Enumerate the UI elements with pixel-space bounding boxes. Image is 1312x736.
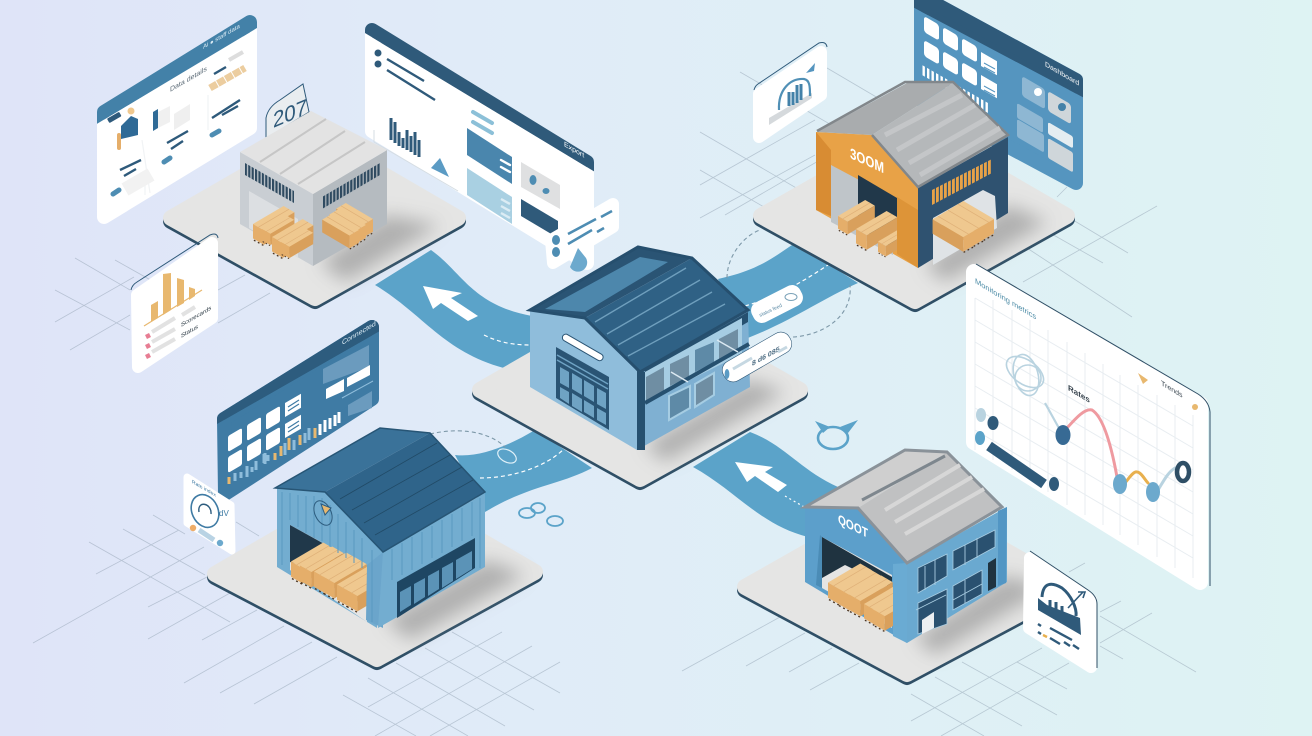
pallet of boxes, side door (933, 201, 994, 253)
panel: top-right blue dashboard (921, 0, 1079, 183)
card: radial dial (186, 477, 232, 551)
road: centre to top-left warehouse (375, 250, 534, 370)
panel: workforce dashboard (104, 22, 250, 217)
warehouse: lower-left blue (275, 428, 485, 628)
panel: main analytics dashboard (372, 30, 587, 263)
platform: bottom-left (215, 480, 535, 662)
platform: top-left (171, 135, 458, 301)
platform shadows (320, 205, 1048, 655)
pallets of boxes (291, 542, 390, 612)
road: centre to bottom-right warehouse (693, 432, 838, 537)
icon: ring with bow (815, 420, 858, 449)
callout: upper label: status feed (758, 303, 783, 319)
tiles (228, 394, 301, 473)
orbit node (1001, 350, 1060, 430)
icon: linked rings (519, 503, 563, 526)
card: radial dial: dV (219, 509, 229, 518)
dial caption: Rate index (192, 479, 216, 499)
callout labels on central warehouse (719, 282, 806, 386)
card captions: Scorecards (181, 305, 211, 329)
card: small bar chart: Status (181, 324, 198, 340)
platform: top-right (761, 128, 1067, 304)
dashed connector arcs (430, 230, 850, 447)
rooftop sign (266, 84, 309, 142)
bar chart (374, 118, 458, 191)
warehouse: grey top-left (240, 84, 387, 266)
emblem (310, 498, 336, 528)
card: gauge report (1029, 551, 1097, 668)
icon: route marker on lower-left road (495, 446, 519, 466)
stat cards (467, 112, 560, 238)
pallets of boxes (828, 564, 915, 632)
tile grid (924, 16, 997, 98)
pallet of boxes (838, 200, 908, 257)
card: gauge icon (754, 42, 827, 137)
panel header caption: Ai ● staff data (203, 23, 240, 51)
platform: centre (480, 298, 800, 482)
window groups (918, 530, 995, 634)
glazed door (556, 347, 609, 430)
status bars (229, 412, 339, 484)
legend (975, 408, 1059, 491)
sign text: 3OOM (850, 146, 884, 177)
rates label: Rates (1068, 383, 1090, 405)
road: centre to top-right warehouse (718, 243, 858, 339)
chart grid (975, 298, 1193, 578)
pallet of boxes (253, 206, 313, 259)
data points (1056, 425, 1189, 502)
placeholder blocks (113, 52, 245, 196)
right widgets (323, 345, 373, 416)
road: centre to bottom-left warehouse (455, 430, 592, 512)
arrow: left road (423, 286, 478, 321)
skylight (561, 333, 604, 362)
trends label: Trends (1161, 379, 1183, 400)
mini status tiles (1017, 76, 1073, 172)
header label: Connected (342, 319, 376, 347)
door opening (831, 165, 893, 255)
header label: Dashboard (1045, 60, 1079, 88)
warehouse: central blue (530, 247, 750, 450)
pallet of boxes, side door (322, 203, 373, 249)
arrow: lower road (735, 462, 787, 492)
header label: Export (564, 140, 585, 160)
warehouse: lower-right blue (805, 450, 1007, 643)
panel: lower-left dashboard (224, 319, 376, 494)
list lines (374, 50, 435, 100)
card: small bar chart (131, 234, 218, 367)
upper window band (645, 312, 749, 403)
vent slats (932, 159, 992, 205)
lower windows (669, 373, 714, 420)
placeholder caption: Data details (170, 64, 207, 94)
sign text: QOOT (838, 512, 868, 541)
warehouse: orange top-right (816, 82, 1008, 268)
orange accents (1138, 373, 1198, 410)
rooftop sign: 207 (273, 94, 307, 133)
corrugated wall stripes (282, 492, 480, 622)
callout card on dashboard (551, 204, 613, 272)
card caption lines (1038, 624, 1079, 649)
trend line (1067, 410, 1175, 490)
chart: large trend panel (974, 264, 1210, 586)
callout: lower label: 8 d6 085 (752, 344, 780, 368)
platform: bottom-right (745, 495, 1070, 677)
chart title: Monitoring metrics (975, 277, 1036, 322)
person illustration (107, 108, 138, 150)
roller window (397, 538, 475, 618)
